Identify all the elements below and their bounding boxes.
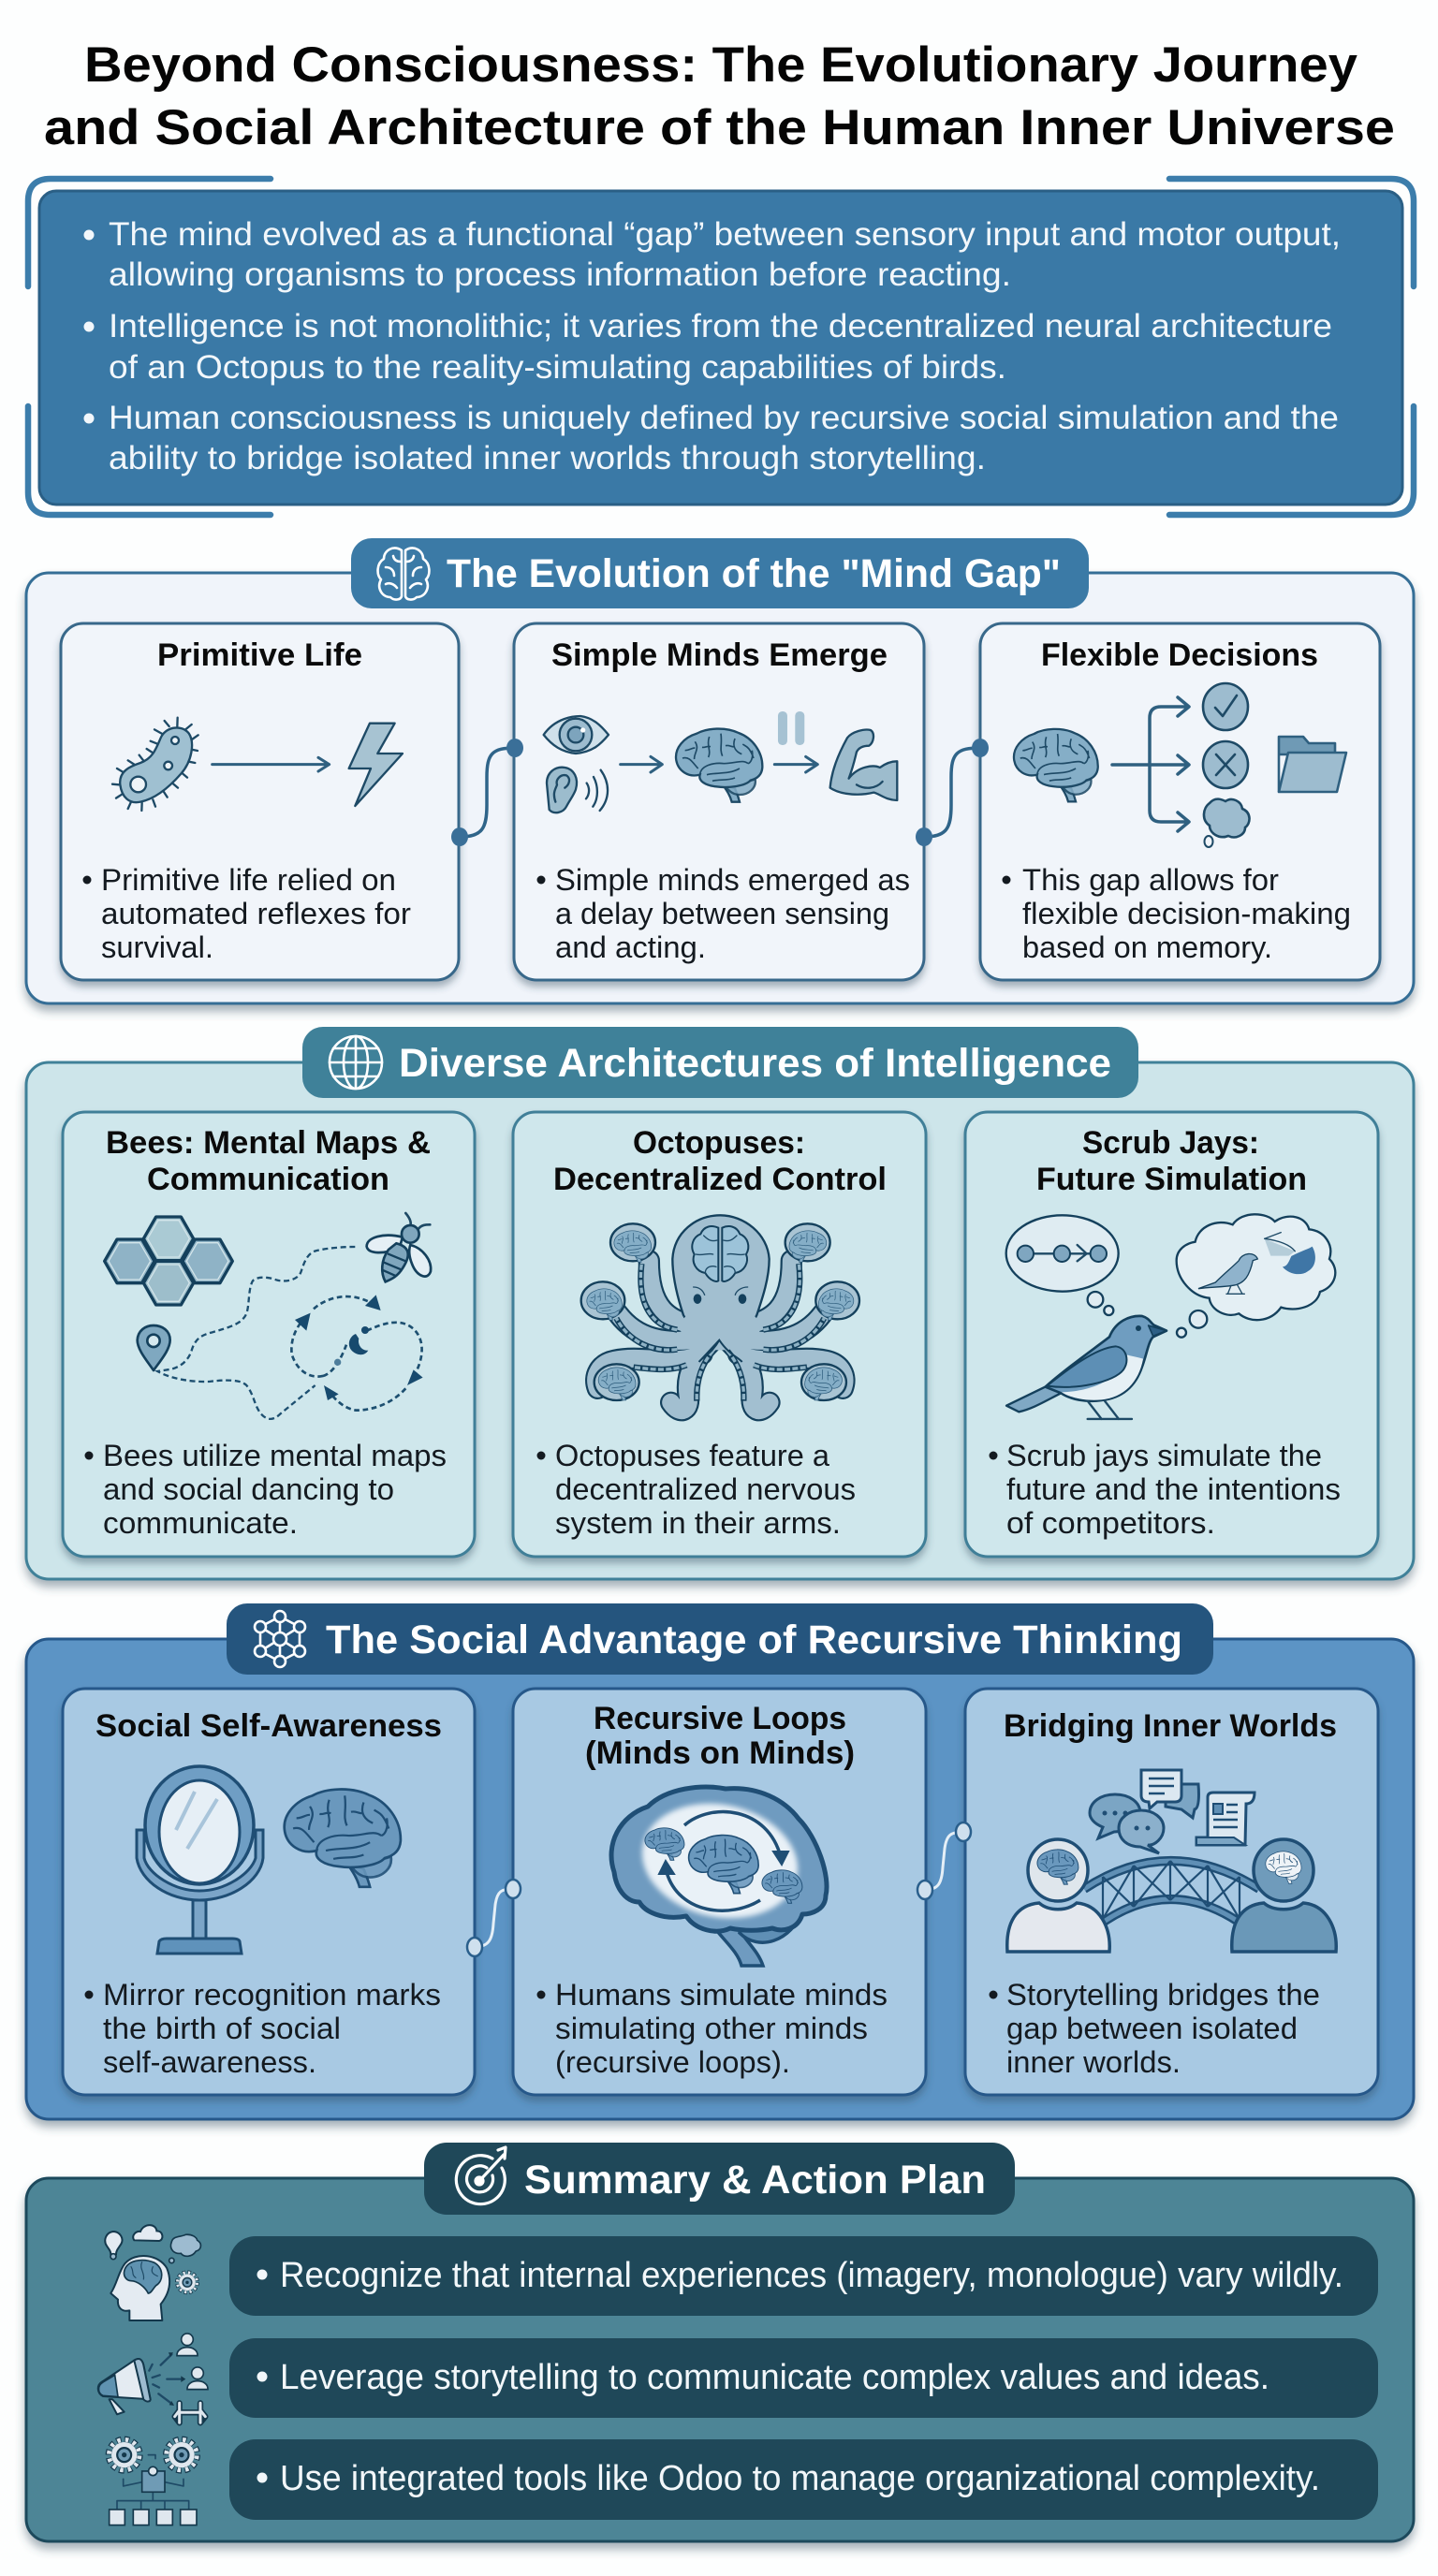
panel: key takeaways: of an Octopus to the reality-simulating capabilities of birds. (109, 349, 1006, 386)
action row 3 (229, 2439, 1378, 2520)
card: bees: Bees utilize mental maps (103, 1439, 447, 1472)
card: scrub jays: future and the intentions (1006, 1472, 1341, 1506)
card: octopuses: decentralized nervous (555, 1472, 856, 1506)
card: primitive life: survival. (101, 930, 213, 964)
card: simple minds emerge: Simple minds emerged as (555, 863, 910, 897)
card: social self-awareness: the birth of social (103, 2012, 341, 2045)
panel: key takeaways (28, 179, 1414, 515)
arrow: connector mirror to loops (467, 1880, 521, 1956)
card: octopuses: Octopuses feature a (555, 1439, 830, 1472)
title: and Social Architecture of the Human Inner Universe (44, 100, 1395, 155)
card: octopuses (513, 1112, 926, 1557)
panel: key takeaways: ability to bridge isolated inner worlds through storytelling. (109, 440, 986, 476)
heading: evolution of the mind gap: The Evolution of the "Mind Gap" (447, 551, 1061, 596)
card: simple minds emerge: Simple Minds Emerge (551, 637, 888, 673)
card: social self-awareness (63, 1689, 475, 2095)
card: bees (63, 1112, 475, 1557)
card: bridging inner worlds (965, 1689, 1378, 2095)
card: scrub jays: of competitors. (1006, 1506, 1215, 1540)
icon: octopus with brains in its arms (581, 1215, 859, 1411)
card: bridging inner worlds: Storytelling bridges the (1006, 1978, 1320, 2012)
arrow: connector simple to flexible (916, 739, 989, 846)
card: bees: and social dancing to (103, 1472, 394, 1506)
card: primitive life: automated reflexes for (101, 897, 411, 930)
card: bees: Bees: Mental Maps & (106, 1125, 431, 1161)
panel: evolution of the mind gap (26, 538, 1414, 1003)
card: scrub jays: Scrub Jays: (1082, 1125, 1259, 1161)
action row 1: Recognize that internal experiences (imagery, monologue) vary wildly. (280, 2256, 1343, 2295)
icon: bacterium to lightning reflex (112, 718, 403, 811)
card: social self-awareness: Social Self-Awareness (95, 1708, 442, 1744)
card: octopuses: Decentralized Control (553, 1162, 887, 1197)
panel: summary and action plan (26, 2143, 1414, 2541)
panel: key takeaways: allowing organisms to process information before reacting. (109, 256, 1011, 293)
icon: brains inside a brain with loop arrows (611, 1787, 827, 1966)
action row 3: Use integrated tools like Odoo to manage organizational complexity. (280, 2459, 1320, 2498)
icon: scrub jay with thought bubbles (1006, 1214, 1335, 1419)
panel: key takeaways: The mind evolved as a functional “gap” between sensory input and motor output, (109, 216, 1341, 253)
card: scrub jays: Scrub jays simulate the (1006, 1439, 1322, 1472)
card: social self-awareness: self-awareness. (103, 2045, 316, 2079)
action row 1 (229, 2236, 1378, 2316)
title (44, 37, 1395, 155)
icon: mirror and brain (137, 1766, 401, 1954)
heading: diverse architectures: Diverse Architectures of Intelligence (399, 1041, 1111, 1086)
card: bees: communicate. (103, 1506, 298, 1540)
action row 2: Leverage storytelling to communicate complex values and ideas. (280, 2358, 1269, 2397)
icon: globe (330, 1036, 382, 1089)
card: simple minds emerge: and acting. (555, 930, 706, 964)
card: bridging inner worlds: Bridging Inner Worlds (1004, 1708, 1337, 1744)
card: scrub jays: Future Simulation (1036, 1162, 1307, 1197)
icon: head with thoughts (105, 2225, 200, 2320)
card: flexible decisions: Flexible Decisions (1041, 637, 1318, 673)
action row 2 (229, 2338, 1378, 2418)
heading: summary and action plan (424, 2143, 1015, 2215)
card: recursive loops (513, 1689, 926, 2095)
card: flexible decisions: based on memory. (1022, 930, 1272, 964)
icon: brain with branching choices (1014, 683, 1346, 847)
panel: diverse architectures of intelligence (26, 1027, 1414, 1579)
icon: brain outline (378, 549, 429, 600)
title: Beyond Consciousness: The Evolutionary Journey (84, 37, 1358, 93)
heading: social advantage (227, 1603, 1213, 1675)
heading: social advantage: The Social Advantage of Recursive Thinking (326, 1617, 1182, 1662)
icon: gears and org chart (109, 2439, 197, 2525)
arrow: connector loops to bridging (917, 1822, 971, 1899)
icon: honeycomb, bee, waggle dance (105, 1213, 431, 1419)
heading: summary and action plan: Summary & Action Plan (524, 2158, 986, 2203)
card: octopuses: system in their arms. (555, 1506, 841, 1540)
card: primitive life (61, 623, 459, 980)
icon: target with arrow (456, 2147, 506, 2204)
card: recursive loops: Recursive Loops (594, 1701, 846, 1736)
icon: sense, brain, pause, muscle (544, 711, 897, 812)
card: scrub jays (965, 1112, 1378, 1557)
card: primitive life: Primitive Life (157, 637, 362, 673)
icon: megaphone broadcasting to people (98, 2334, 208, 2422)
card: primitive life: Primitive life relied on (101, 863, 396, 897)
heading: evolution of the mind gap (351, 538, 1089, 608)
card: simple minds emerge: a delay between sensing (555, 897, 889, 930)
card: simple minds emerge (514, 623, 924, 980)
card: social self-awareness: Mirror recognition marks (103, 1978, 441, 2012)
card: recursive loops: simulating other minds (555, 2012, 868, 2045)
card: bridging inner worlds: inner worlds. (1006, 2045, 1181, 2079)
card: recursive loops: Humans simulate minds (555, 1978, 888, 2012)
card: bees: Communication (147, 1162, 389, 1197)
card: flexible decisions: flexible decision-making (1022, 897, 1351, 930)
icon: network of nodes (255, 1611, 305, 1667)
panel: key takeaways: Human consciousness is uniquely defined by recursive social simulation and the (109, 400, 1339, 436)
arrow: connector primitive to simple (451, 739, 523, 846)
card: bridging inner worlds: gap between isolated (1006, 2012, 1298, 2045)
icon: bridge between two people with stories (1007, 1770, 1336, 1952)
card: flexible decisions (980, 623, 1380, 980)
card: recursive loops: (Minds on Minds) (585, 1735, 855, 1771)
panel: key takeaways: Intelligence is not monolithic; it varies from the decentralized neural architecture (109, 308, 1332, 344)
card: flexible decisions: This gap allows for (1022, 863, 1279, 897)
card: octopuses: Octopuses: (633, 1125, 805, 1161)
panel: social advantage of recursive thinking (26, 1603, 1414, 2119)
card: recursive loops: (recursive loops). (555, 2045, 790, 2079)
heading: diverse architectures (302, 1027, 1138, 1098)
